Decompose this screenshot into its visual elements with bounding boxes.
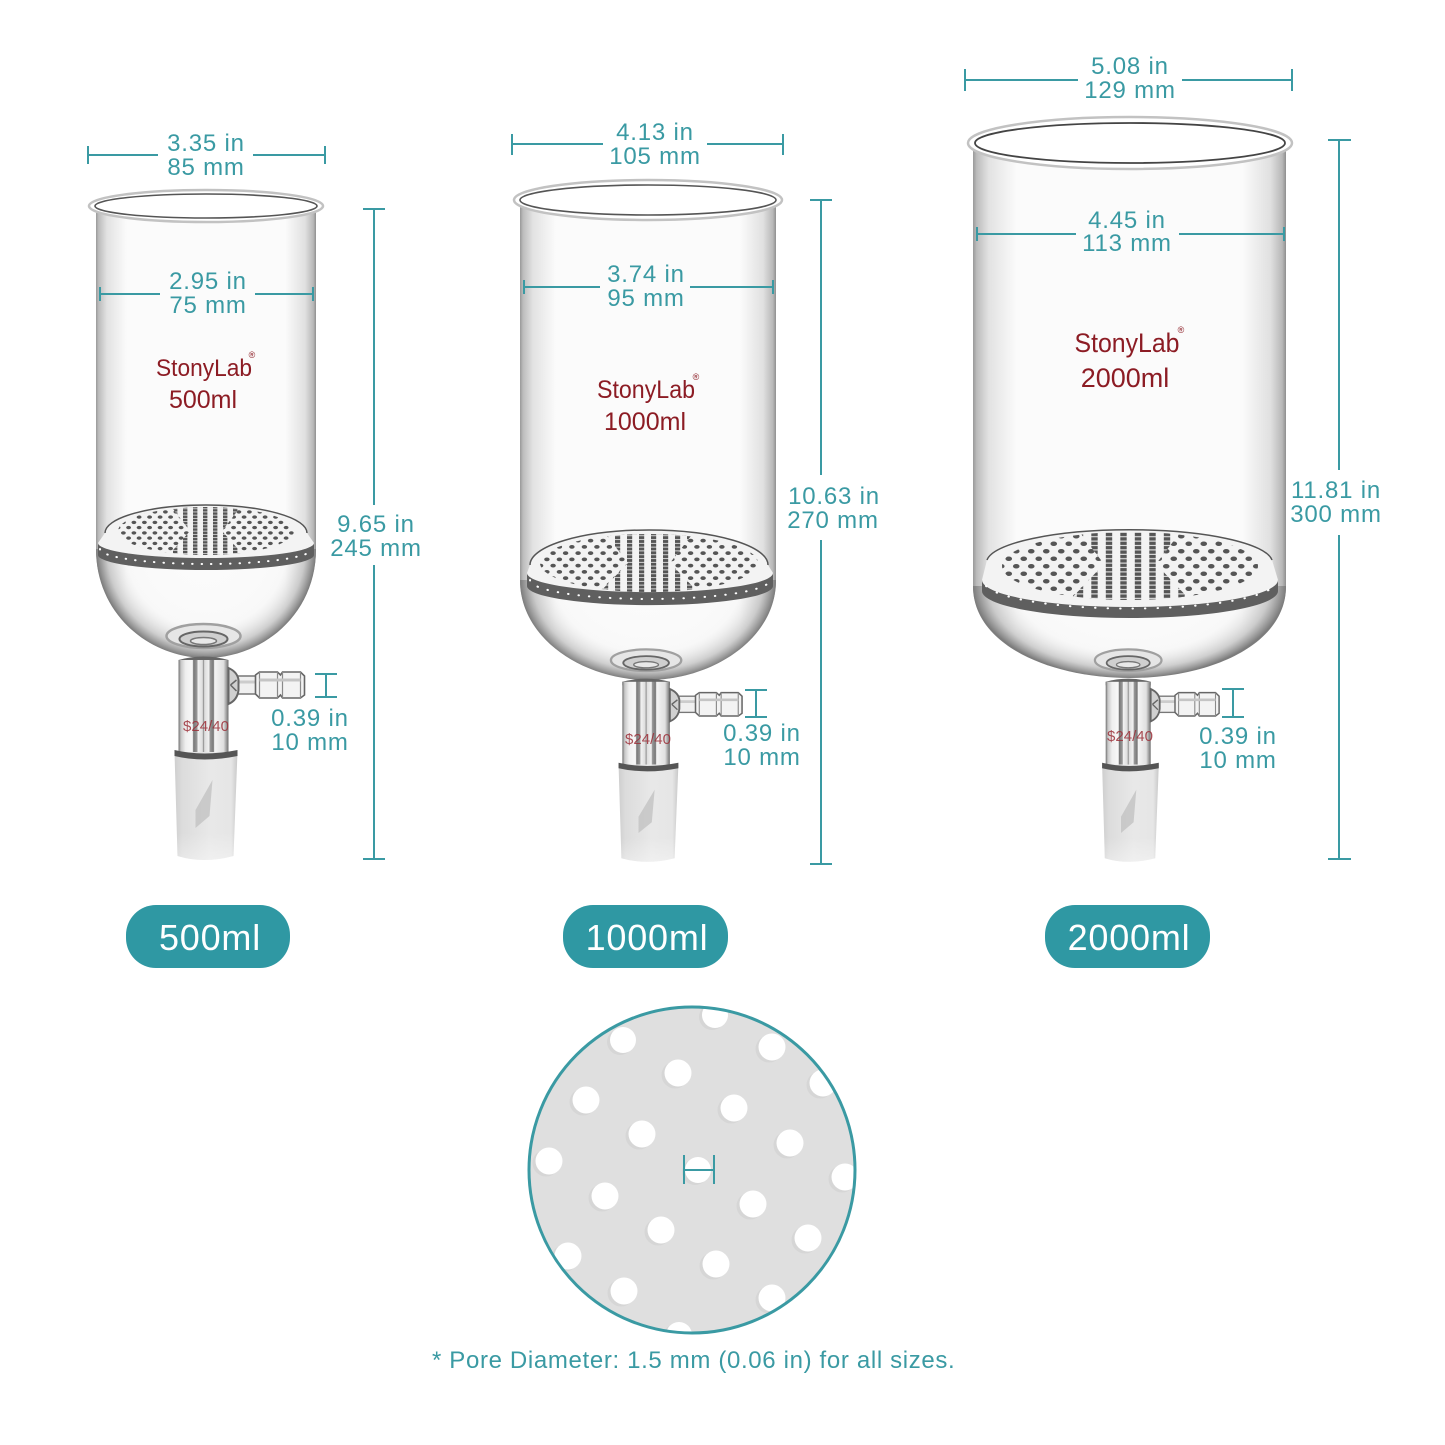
funnel: 1000ml [514, 180, 782, 862]
hose barb: 10 mm [271, 729, 349, 756]
brand: ® [693, 372, 700, 382]
height: 9.65 in [337, 511, 415, 538]
brand: StonyLab [1074, 328, 1180, 358]
hose barb [723, 690, 801, 771]
height: 270 mm [787, 507, 879, 534]
capacity: 2000ml [1081, 363, 1169, 393]
footnote: * Pore Diameter: 1.5 mm (0.06 in) for all sizes. [432, 1347, 955, 1374]
height: 10.63 in [788, 483, 880, 510]
rim [89, 190, 323, 222]
stem and side arm [166, 624, 304, 860]
dimensions: 1000ml [512, 119, 880, 864]
hose barb: 0.39 in [723, 720, 801, 747]
pill: 500ml: 500ml [159, 917, 261, 958]
pill: 2000ml: 2000ml [1068, 917, 1190, 958]
lower bowl [973, 586, 1286, 678]
inner diameter: 113 mm [1082, 230, 1172, 257]
pill: 2000ml [1045, 905, 1210, 968]
sintered plate [98, 500, 314, 570]
hose barb: 10 mm [723, 744, 801, 771]
capacity: 500ml [169, 386, 237, 414]
glass body [520, 203, 776, 680]
hose barb [271, 674, 349, 756]
lower bowl [520, 580, 776, 680]
joint label: $24/40 [183, 718, 229, 735]
height [1290, 140, 1382, 859]
inner diameter [977, 207, 1284, 257]
brand: StonyLab [156, 355, 252, 382]
height: 11.81 in [1291, 477, 1381, 504]
brand: ® [1178, 325, 1185, 335]
rim [968, 117, 1292, 169]
pill: 1000ml [563, 905, 728, 968]
outer diameter: 3.35 in [167, 130, 245, 157]
pill: 500ml [126, 905, 290, 968]
sintered plate [527, 530, 773, 605]
outer diameter: 85 mm [167, 154, 245, 181]
height [330, 209, 422, 859]
outer diameter: 4.13 in [616, 119, 694, 146]
outer diameter [512, 119, 783, 170]
height: 245 mm [330, 535, 422, 562]
hose barb: 0.39 in [1199, 723, 1277, 750]
hose barb: 10 mm [1199, 747, 1277, 774]
brand: StonyLab [597, 376, 695, 404]
funnel: 500ml [89, 190, 323, 860]
inner diameter: 4.45 in [1088, 207, 1166, 234]
sintered plate [982, 528, 1278, 618]
pore detail circle [529, 1002, 858, 1350]
glass body [973, 145, 1286, 678]
inner diameter [100, 268, 313, 319]
height: 300 mm [1290, 501, 1382, 528]
inner diameter: 3.74 in [607, 261, 685, 288]
dimensions: 500ml [88, 130, 422, 859]
glass body [96, 208, 316, 658]
joint label: $24/40 [625, 731, 671, 748]
pore diameter marker [684, 1155, 714, 1184]
outer diameter [965, 53, 1292, 104]
rim [514, 180, 782, 220]
stem and side arm [611, 649, 742, 862]
inner diameter: 2.95 in [169, 268, 247, 295]
outer diameter: 5.08 in [1091, 53, 1169, 80]
inner diameter: 75 mm [169, 292, 247, 319]
hose barb: 0.39 in [271, 705, 349, 732]
inner diameter [524, 261, 773, 312]
outer diameter: 105 mm [609, 143, 701, 170]
outer diameter [88, 130, 325, 181]
hose barb [1199, 689, 1277, 774]
inner diameter: 95 mm [607, 285, 685, 312]
outer diameter: 129 mm [1084, 77, 1176, 104]
joint label: $24/40 [1107, 728, 1153, 745]
dimensions: 2000ml [965, 53, 1382, 859]
pill: 1000ml: 1000ml [586, 917, 708, 958]
brand: ® [249, 350, 256, 360]
height [787, 200, 880, 864]
stem and side arm [1095, 649, 1219, 862]
funnel: 2000ml [968, 117, 1292, 862]
lower bowl [96, 549, 316, 658]
capacity: 1000ml [604, 408, 686, 436]
